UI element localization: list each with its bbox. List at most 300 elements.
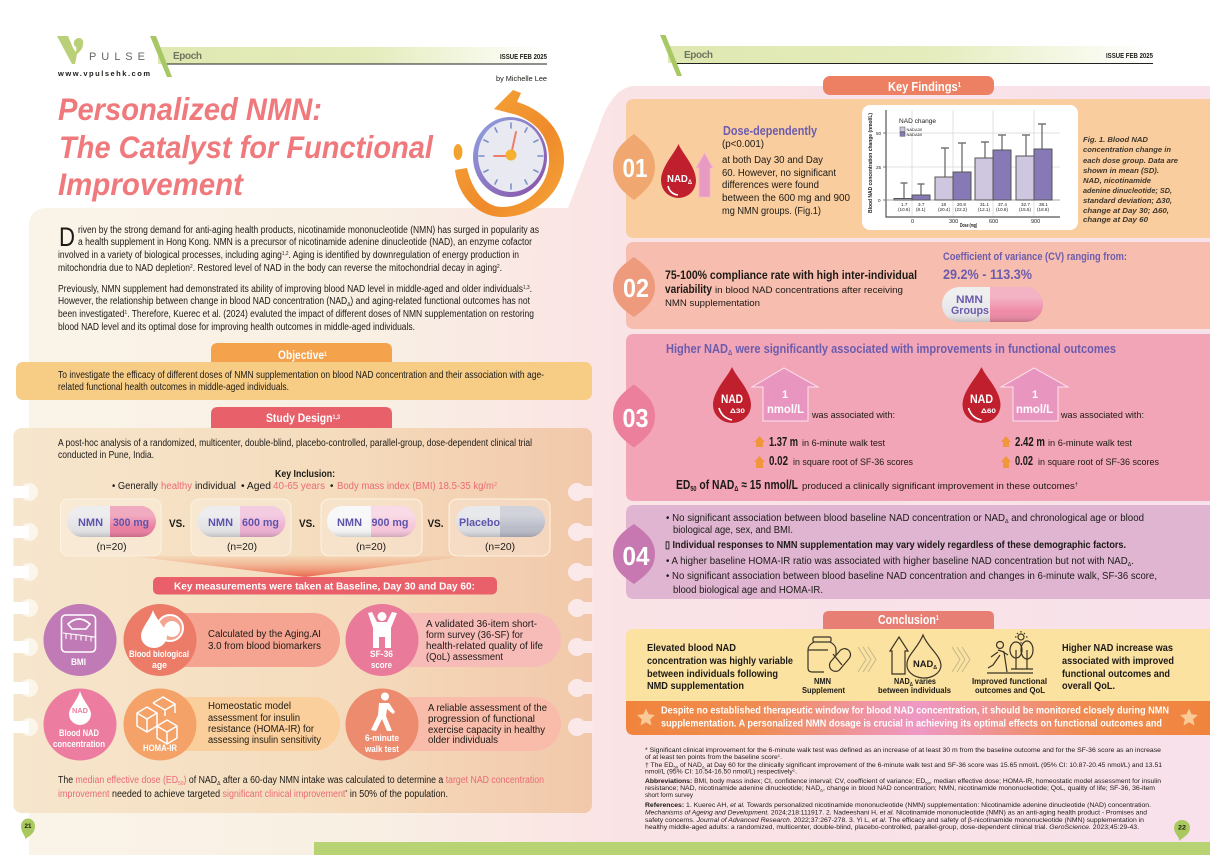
axis labels: (20.4) — [938, 207, 950, 212]
heading: key findings — [823, 76, 994, 95]
text: ED50: ≈ 15 nmol/L — [738, 477, 798, 492]
intro text: ) and aging-related functional outcomes has not — [350, 296, 530, 307]
text: ED50: † — [1075, 482, 1078, 488]
text: dose-dependently: mg NMN groups. (Fig.1) — [722, 206, 821, 217]
chart legend: NADΔ60 — [906, 132, 923, 137]
capsule: NMN 900 mg: NMN — [337, 517, 362, 529]
text: finding 04 bullets: . — [1131, 556, 1134, 567]
measure: SF-36 score: (QoL) assessment — [426, 652, 503, 663]
footnotes: 1 — [778, 753, 781, 758]
text: compliance — [665, 268, 917, 309]
text: dose-dependently: between the 600 mg and 900 — [722, 193, 850, 204]
result: delta 60: 2.42 m — [1015, 434, 1045, 449]
axis labels: 25 — [876, 165, 882, 170]
result: delta 60 — [962, 367, 1159, 468]
panel: finding 02: 02 — [623, 273, 649, 303]
footnotes: * Significant clinical improvement for the 6-minute walk test was defined as an increase of at least 30 m from the baseline outcome and for the SF-36 score as an increase — [645, 747, 1161, 754]
measure: 6-minute walk test: exercise capacity in healthy — [428, 725, 545, 736]
result: delta 30 — [713, 367, 913, 468]
panel: conclusion: Conclusion — [878, 612, 949, 627]
intro text: 2 — [190, 264, 193, 270]
measure: blood biological age — [124, 604, 340, 676]
measure: HOMA-IR: assessing insulin sensitivity — [208, 735, 321, 746]
figure caption: change at Day 60 — [1083, 215, 1149, 224]
text: compliance: 75-100% compliance rate with high inter-individual — [665, 268, 917, 282]
page number 21: 21 — [24, 823, 32, 830]
intro text: been investigated — [58, 309, 135, 320]
measure: blood biological age: 3.0 from blood biomarkers — [208, 641, 321, 652]
axis labels: Dose (mg) — [960, 223, 977, 229]
panel: finding 02 — [613, 242, 1210, 329]
result: delta 60: 1 — [1032, 389, 1038, 401]
result: delta 30: 0.02 — [769, 453, 788, 468]
measure: SF-36 score — [346, 604, 561, 676]
text: median effective dose: after a 60-day NMN intake was calculated to determine a — [220, 775, 446, 786]
funnel arrow — [131, 556, 467, 577]
capsule: NMN 600 mg: (n=20) — [227, 542, 257, 553]
text: conclusion right: associated with improved — [1062, 655, 1174, 667]
footnotes: resistance; NAD, nicotinamide adenine dinucleotide; NAD — [645, 785, 811, 792]
text: median effective dose: improvement needed to achieve targeted significant clinical improvement — [58, 789, 358, 800]
intro text: mitochondria due to NAD depletion — [58, 263, 210, 274]
icon: clock with orange arrow — [454, 90, 564, 217]
text: finding 04 bullets: • A higher baseline HOMA-IR ratio was associated with higher baseline NAD concentration but not with NAD — [666, 556, 1144, 567]
icon: drop and cell — [141, 610, 183, 648]
figure caption: adenine dinucleotide; SD, — [1083, 186, 1172, 195]
label: NMN supplement — [802, 676, 845, 695]
result: delta 30: 1.37 m — [769, 434, 798, 449]
text: finding 04 bullets: and chronological age or blood — [1009, 513, 1144, 524]
footnotes: healthy middle-aged adults: a randomized, multicenter, double-blind, placebo-controlled, parallel-group, dose-dependent clinical trial. GeroScience. 2023;45:29-43. — [645, 824, 1139, 831]
measure: HOMA-IR — [124, 688, 340, 760]
label: NAD varies: NAD — [894, 676, 912, 686]
axis labels: 38.1 — [1039, 202, 1048, 207]
intro text: . — [500, 263, 502, 274]
figure caption: standard deviation; Δ30, — [1083, 196, 1172, 205]
panel: objective — [16, 343, 592, 400]
text: coefficient of variance: Coefficient of variance (CV) ranging from: — [943, 251, 1127, 263]
footnotes: Δ — [820, 788, 823, 792]
result: delta 30: in 6-minute walk test — [802, 438, 885, 449]
capsule: NMN 900 mg: (n=20) — [356, 542, 386, 553]
text: finding 04 bullets: • No significant association between blood baseline NAD concentration or NAD — [666, 513, 1015, 524]
capsule: NMN 600 mg: NMN — [208, 517, 233, 529]
axis labels: (10.6) — [898, 207, 910, 212]
axis labels: 0 — [878, 198, 881, 203]
footnotes: 1 — [793, 768, 796, 772]
result: delta 30: 1 — [782, 389, 788, 401]
axis labels: 31.1 — [980, 202, 989, 207]
text: conclusion left: between individuals following — [647, 668, 778, 680]
chart: blood NAD change by dose — [862, 105, 1078, 230]
header band: Epoch left: ISSUE FEB 2025 — [500, 54, 547, 61]
text: coefficient of variance: 29.2% - 113.3% — [943, 266, 1032, 282]
result: delta 60: 0.02 — [1015, 453, 1033, 468]
footnotes: Mechanisms of Ageing and Development. 2024;218:111917. 2. Nadeeshani H, et al. Nicotinamide mononucleotide (NMN) as an anti-aging health product - Promises and — [645, 810, 1147, 816]
icon: walking person — [371, 692, 395, 731]
measure: blood biological age: Blood biological — [129, 649, 189, 660]
label: key measurements — [153, 577, 497, 594]
axis labels: (12.1) — [978, 207, 990, 212]
intro text: 2 — [497, 264, 500, 270]
measure: HOMA-IR: Homeostatic model — [208, 701, 291, 712]
intro text: a health supplement in Hong Kong. NMN is a precursor of nicotinamide adenine dinucleotide (NAD), an enzyme cofactor — [78, 237, 533, 248]
text: dose-dependently: Dose-dependently — [723, 124, 817, 138]
text: ED50: produced a clinically significant improvement in these outcomes — [802, 481, 1070, 492]
capsule: NMN 600 mg — [191, 499, 291, 556]
footnotes: † The ED — [645, 762, 672, 769]
capsule: NMN 300 mg: (n=20) — [96, 542, 126, 553]
heading: higher NAD: were significantly associated with improvements in functional outcomes — [732, 341, 1116, 356]
measure: SF-36 score: SF-36 — [370, 649, 393, 660]
intro text — [58, 222, 539, 333]
result: delta 60: in 6-minute walk test — [1048, 438, 1132, 449]
axis labels: 20.8 — [957, 202, 966, 207]
measure: SF-36 score: form survey (36-SF) for — [426, 630, 524, 641]
text: finding 04 bullets: Δ — [1005, 519, 1009, 525]
icon: cubes — [137, 697, 177, 744]
result: delta 60: Δ60 — [981, 409, 997, 415]
axis labels: 37.4 — [998, 202, 1007, 207]
text: conclusion right: functional outcomes and — [1062, 668, 1170, 680]
text: finding 04 bullets: biological age, sex, and BMI. — [673, 525, 793, 536]
chart legend: NADΔ30 — [906, 127, 923, 132]
text: dose-dependently: 60. However, no significant — [722, 168, 836, 179]
result: delta 60: was associated with: — [1060, 410, 1144, 421]
icon: chevrons — [858, 647, 876, 672]
footnotes: Abbreviations: BMI, body mass index; CI, confidence interval; CV, coefficient of variance; ED — [645, 778, 917, 785]
footnotes: short form survey — [645, 792, 694, 799]
text: key inclusion: • — [330, 481, 334, 492]
title: Personalized NMN: — [58, 91, 322, 127]
header band: Epoch right — [660, 35, 1153, 76]
axis labels: 900 — [1031, 219, 1040, 225]
axis labels: 3.7 — [918, 202, 925, 207]
measure: BMI: BMI — [71, 657, 86, 667]
text: dose-dependently: at both Day 30 and Day — [722, 155, 823, 166]
icon: NAD drop: NAD — [72, 708, 88, 715]
footnotes: , median effective dose; HOMA-IR, homeostatic model assessment for insulin — [930, 778, 1161, 785]
text: median effective dose — [58, 775, 544, 800]
footnotes: nmol/L (95% CI: 10.54-16.50 nmol/L) respectively — [645, 768, 787, 776]
label: key measurements: Key measurements were taken at Baseline, Day 30 and Day 60: — [174, 580, 475, 592]
capsule: NMN 600 mg: 600 mg — [242, 517, 279, 529]
figure caption: NAD, nicotinamide — [1083, 176, 1152, 185]
figure caption: concentration change in — [1083, 145, 1171, 154]
figure caption: Fig. 1. Blood NAD — [1083, 135, 1149, 144]
text: conclusion left: NMD supplementation — [647, 680, 744, 692]
icon: NAD varies arrow and drop — [890, 635, 941, 678]
axis labels: 300 — [949, 219, 958, 225]
footnotes: . — [780, 754, 782, 761]
header band: Epoch right: Epoch — [684, 50, 713, 61]
panel: objective: Objective — [278, 350, 330, 362]
text: finding 04 bullets: • No significant association between blood baseline NAD concentration and changes in 6-minute walk, SF-36 score, — [666, 571, 1157, 582]
figure caption: change at Day 30; Δ60, — [1083, 206, 1169, 215]
text: key inclusion: Body mass index (BMI) 18.5-35 kg/m — [337, 481, 498, 492]
capsule: placebo — [449, 499, 550, 556]
capsule: NMN 300 mg — [60, 499, 161, 556]
chart legend: NAD change — [899, 118, 936, 125]
text: median effective dose: target NAD concentration — [446, 775, 544, 786]
measure: blood NAD concentration — [44, 688, 116, 760]
figure caption — [1083, 135, 1179, 224]
capsule: placebo: (n=20) — [485, 542, 515, 553]
text: key inclusion: 40-65 years — [273, 481, 325, 492]
text: conclusion left — [647, 642, 793, 692]
axis labels: (22.2) — [955, 207, 967, 212]
icon: NMN supplement bottle — [808, 637, 853, 674]
text: conclusion left: concentration was highly variable — [647, 655, 793, 667]
axis labels: 50 — [876, 131, 882, 136]
measure: blood biological age: age — [152, 660, 167, 671]
footnotes: of at least ten points from the baseline score — [645, 754, 773, 761]
text: ED50: Δ — [734, 486, 738, 493]
footnotes: Δ — [702, 764, 705, 770]
label: improved outcomes: Improved functional — [972, 676, 1047, 686]
intro text: Previously, NMN supplement had demonstrated its ability of improving blood NAD level in middle-aged and older individuals — [58, 284, 594, 295]
text: coefficient of variance — [943, 251, 1127, 282]
text: key inclusion: 2 — [494, 482, 497, 488]
panel: objective: 1 — [324, 352, 328, 358]
intro text: . Aging is identified by downregulation of energy production in — [289, 250, 519, 261]
text: dose-dependently — [722, 124, 850, 217]
chart legend — [899, 118, 936, 137]
intro text: . — [530, 284, 532, 295]
intro text: However, the relationship between change in blood NAD concentration (NAD — [58, 296, 391, 307]
text: ED50: ED — [676, 477, 694, 492]
logo: V PULSE: www.vpulsehk.com — [57, 69, 150, 78]
text: finding 04 bullets: Δ — [1128, 562, 1132, 568]
text: finding 04 bullets: blood biological age and HOMA-IR. — [673, 585, 823, 596]
axis labels: 32.7 — [1021, 202, 1030, 207]
label: NAD varies: between individuals — [878, 685, 951, 695]
title: The Catalyst for Functional — [59, 129, 434, 165]
panel: study design — [13, 407, 593, 813]
axis labels: 0 — [911, 219, 914, 225]
header band: Epoch left — [158, 47, 547, 64]
intro text: D — [59, 222, 75, 252]
footnotes — [645, 747, 1162, 831]
footnotes: . — [795, 768, 797, 776]
icon: NAD drop with up arrow — [661, 144, 713, 198]
label: NAD varies: Δ — [910, 682, 913, 688]
axis labels: 1.7 — [901, 202, 908, 207]
intro text: . Therefore, Kuerec et al. (2024) evaluted the impact of different doses of NMN supplementation on restoring — [127, 309, 534, 320]
label: NAD varies: varies — [913, 676, 936, 686]
text: conclusion right — [1062, 642, 1174, 692]
intro text: blood NAD level and its optimal dose for improving health outcomes in middle-aged individuals. — [58, 322, 415, 333]
text: finding 04 bullets: ▯ Individual responses to NMN supplementation may vary widely regardless of these demographic factors. — [665, 540, 1126, 551]
text: median effective dose: Δ — [217, 781, 221, 787]
text: key inclusion: • Aged — [241, 481, 271, 492]
capsule: NMN 900 mg — [321, 499, 422, 556]
capsule: NMN groups: NMN — [956, 294, 983, 306]
intro text: 1,2 — [282, 251, 289, 257]
text: conclusion right: overall QoL. — [1062, 680, 1115, 692]
result: delta 60: nmol/L — [1016, 402, 1053, 416]
result: delta 60: in square root of SF-36 scores — [1038, 457, 1159, 468]
result: delta 30: in square root of SF-36 scores — [793, 457, 913, 468]
text: compliance: NMN supplementation — [665, 298, 760, 309]
heading: key findings: 1 — [958, 82, 961, 89]
bars — [894, 149, 1052, 200]
label: NMN supplement: NMN — [814, 676, 831, 686]
error bars — [900, 124, 1046, 198]
header band: Epoch right: ISSUE FEB 2025 — [1106, 53, 1153, 60]
axis labels: (15.5) — [1019, 207, 1031, 212]
capsule: NMN 900 mg: 900 mg — [372, 517, 408, 529]
text: ED50: 50 — [690, 486, 697, 493]
result: delta 30: nmol/L — [767, 402, 804, 416]
intro text: involved in a variety of biological processes, including aging — [58, 250, 317, 261]
icon: NAD varies arrow and drop: Δ — [933, 665, 937, 671]
text: study summary — [58, 438, 532, 461]
label: VS: VS. — [428, 518, 444, 530]
page number 22 — [1174, 820, 1190, 841]
footer bar — [314, 842, 1210, 855]
text: key inclusion: Key Inclusion: — [275, 469, 335, 480]
header band: Epoch left: Epoch — [173, 51, 202, 62]
axis labels: (8.1) — [916, 207, 926, 212]
text: ED50 — [676, 477, 1078, 493]
label: NAD varies — [878, 676, 951, 695]
result: delta 30: NAD — [721, 392, 743, 406]
capsule: placebo: Placebo — [459, 517, 500, 529]
measure: BMI — [44, 604, 116, 676]
measure: blood biological age: Calculated by the Aging.AI — [208, 629, 321, 640]
title: Improvement — [58, 166, 244, 202]
text: finding 04 bullets — [665, 513, 1157, 596]
measure: HOMA-IR: assessment for insulin — [208, 713, 300, 724]
footnotes: at Day 60 for the clinically significant improvement of the 6-minute walk test and SF-36 score was 15.65 nmol/L (95% CI: 10.87-20.45 nmol/L) and 13.51 — [705, 762, 1162, 769]
text: study summary: conducted in Pune, India. — [58, 450, 154, 461]
axis labels: 600 — [989, 219, 998, 225]
measure: SF-36 score: health-related quality of life — [426, 641, 543, 652]
footnotes: , change in blood NAD concentration; NMN, nicotinamide mononucleotide; QoL, quality of life; SF-36, 36-item — [823, 785, 1155, 792]
measure: blood NAD concentration: concentration — [53, 739, 105, 750]
text: key inclusion — [112, 469, 497, 492]
measure: blood NAD concentration: Blood NAD — [59, 728, 99, 739]
text: median effective dose: in 50% of the population. — [347, 789, 448, 800]
measure: 6-minute walk test: progression of functional — [428, 714, 535, 725]
panel: finding 01 — [613, 99, 1210, 238]
label: VS: VS. — [169, 518, 185, 530]
intro text: riven by the strong demand for anti-aging health products, nicotinamide mononucleotide (NMN) has surged in popularity as — [78, 225, 539, 236]
panel: finding 04 — [613, 505, 1210, 599]
text: dose-dependently: differences were found — [722, 180, 819, 191]
capsule: NMN groups — [942, 287, 1043, 322]
title — [58, 91, 434, 202]
icon: NAD varies arrow and drop: NAD — [913, 659, 932, 669]
text: dose-dependently: (p<0.001) — [722, 139, 764, 150]
measure: SF-36 score: score — [371, 660, 392, 671]
measure: HOMA-IR: resistance (HOMA-IR) for — [208, 724, 315, 735]
label: NMN supplement: Supplement — [802, 685, 845, 695]
icon: person arms up — [368, 612, 397, 648]
text: median effective dose: The median effective dose (ED — [58, 775, 190, 786]
icon: NAD drop with up arrow: NAD — [667, 174, 689, 185]
text: median effective dose: * — [345, 790, 348, 796]
axis labels — [868, 113, 1049, 229]
text: key inclusion: • Generally — [112, 481, 158, 492]
intro text: 1 — [125, 310, 127, 316]
panel: finding 03 — [613, 334, 1210, 501]
measure: 6-minute walk test: older individuals — [428, 735, 498, 746]
footnotes: of NAD — [678, 762, 702, 769]
page number 22: 22 — [1178, 824, 1186, 832]
text: study summary: A post-hoc analysis of a randomized, multicenter, double-blind, placebo-controlled, parallel-group, dose-dependent clinical trial — [58, 438, 532, 449]
intro text: . Restored level of NAD in the body can reverse the mitochondrial decay in aging — [193, 263, 497, 274]
icon: runner and trees — [987, 631, 1033, 673]
figure caption: each dose group. Data are — [1083, 156, 1179, 165]
label: improved outcomes: outcomes and QoL — [975, 685, 1045, 695]
text: ED50: of NAD — [697, 477, 734, 492]
heading: key findings: Key Findings — [888, 79, 970, 94]
text: key inclusion: healthy — [161, 481, 192, 492]
panel: conclusion: 1 — [936, 615, 939, 622]
measure: 6-minute walk test: 6-minute — [365, 733, 399, 744]
intro text: 1,3 — [523, 285, 530, 291]
result: delta 30: Δ30 — [730, 409, 746, 415]
measure: HOMA-IR: HOMA-IR — [143, 743, 177, 754]
logo: V PULSE — [57, 36, 172, 78]
panel: objective: To investigate the efficacy of different doses of NMN supplementation on blood NAD concentration and their association with age- — [58, 370, 544, 381]
panel: objective: related functional health outcomes in middle-aged individuals. — [58, 382, 289, 393]
figure caption: shown in mean (SD). — [1083, 166, 1159, 175]
page number 21 — [21, 819, 35, 839]
measure: 6-minute walk test — [346, 688, 561, 760]
intro text: Δ — [347, 302, 351, 308]
panel: finding 04: 04 — [622, 541, 650, 571]
heading: higher NAD: Δ — [728, 350, 732, 357]
text: median effective dose: of NAD — [189, 775, 221, 786]
text: conclusion left: Elevated blood NAD — [647, 642, 736, 654]
footnotes: 50 — [925, 780, 931, 786]
label: VS: VS. — [299, 518, 315, 530]
text: conclusion right: Higher NAD increase was — [1062, 642, 1173, 654]
logo: V PULSE: P U L S E — [89, 51, 145, 63]
result: delta 60: NAD — [970, 392, 993, 406]
text: key inclusion: individual — [195, 481, 236, 492]
axis labels: (10.8) — [996, 207, 1008, 212]
icon: chevrons — [952, 647, 970, 672]
capsule: NMN groups: Groups — [951, 305, 989, 317]
axis labels: Blood NAD concentration change (nmol/L) — [868, 113, 874, 213]
footnotes: 50 — [674, 764, 679, 770]
text: median effective dose: 50 — [178, 781, 184, 787]
panel: finding 03: 03 — [622, 403, 648, 433]
icon: scale — [62, 615, 96, 652]
text: compliance: in blood NAD concentrations after receiving — [715, 285, 903, 296]
text: median effective dose: ) — [184, 775, 186, 786]
heading: study design: Study Design — [266, 413, 339, 425]
label: improved outcomes — [972, 676, 1047, 695]
callout: conclusion band — [626, 701, 1210, 735]
heading: study design: 1,3 — [332, 415, 341, 421]
footnotes: References: 1. Kuerec AH, et al. Towards personalized nicotinamide mononucleotide (NMN) supplementation: Nicotinamide adenine dinucleotide (NAD) concentration. — [645, 802, 1151, 809]
axis labels: (18.8) — [1037, 207, 1049, 212]
icon: NAD drop with up arrow: Δ — [688, 180, 693, 186]
heading: higher NAD: Higher NAD — [666, 341, 739, 356]
capsule: NMN 300 mg: 300 mg — [113, 517, 149, 529]
result: delta 30: was associated with: — [811, 410, 895, 421]
panel: finding 01: 01 — [622, 153, 648, 183]
text: compliance: variability — [665, 282, 712, 296]
measure: SF-36 score: A validated 36-item short- — [426, 619, 537, 630]
axis labels: 18 — [941, 202, 947, 207]
capsule: NMN 300 mg: NMN — [78, 517, 103, 529]
